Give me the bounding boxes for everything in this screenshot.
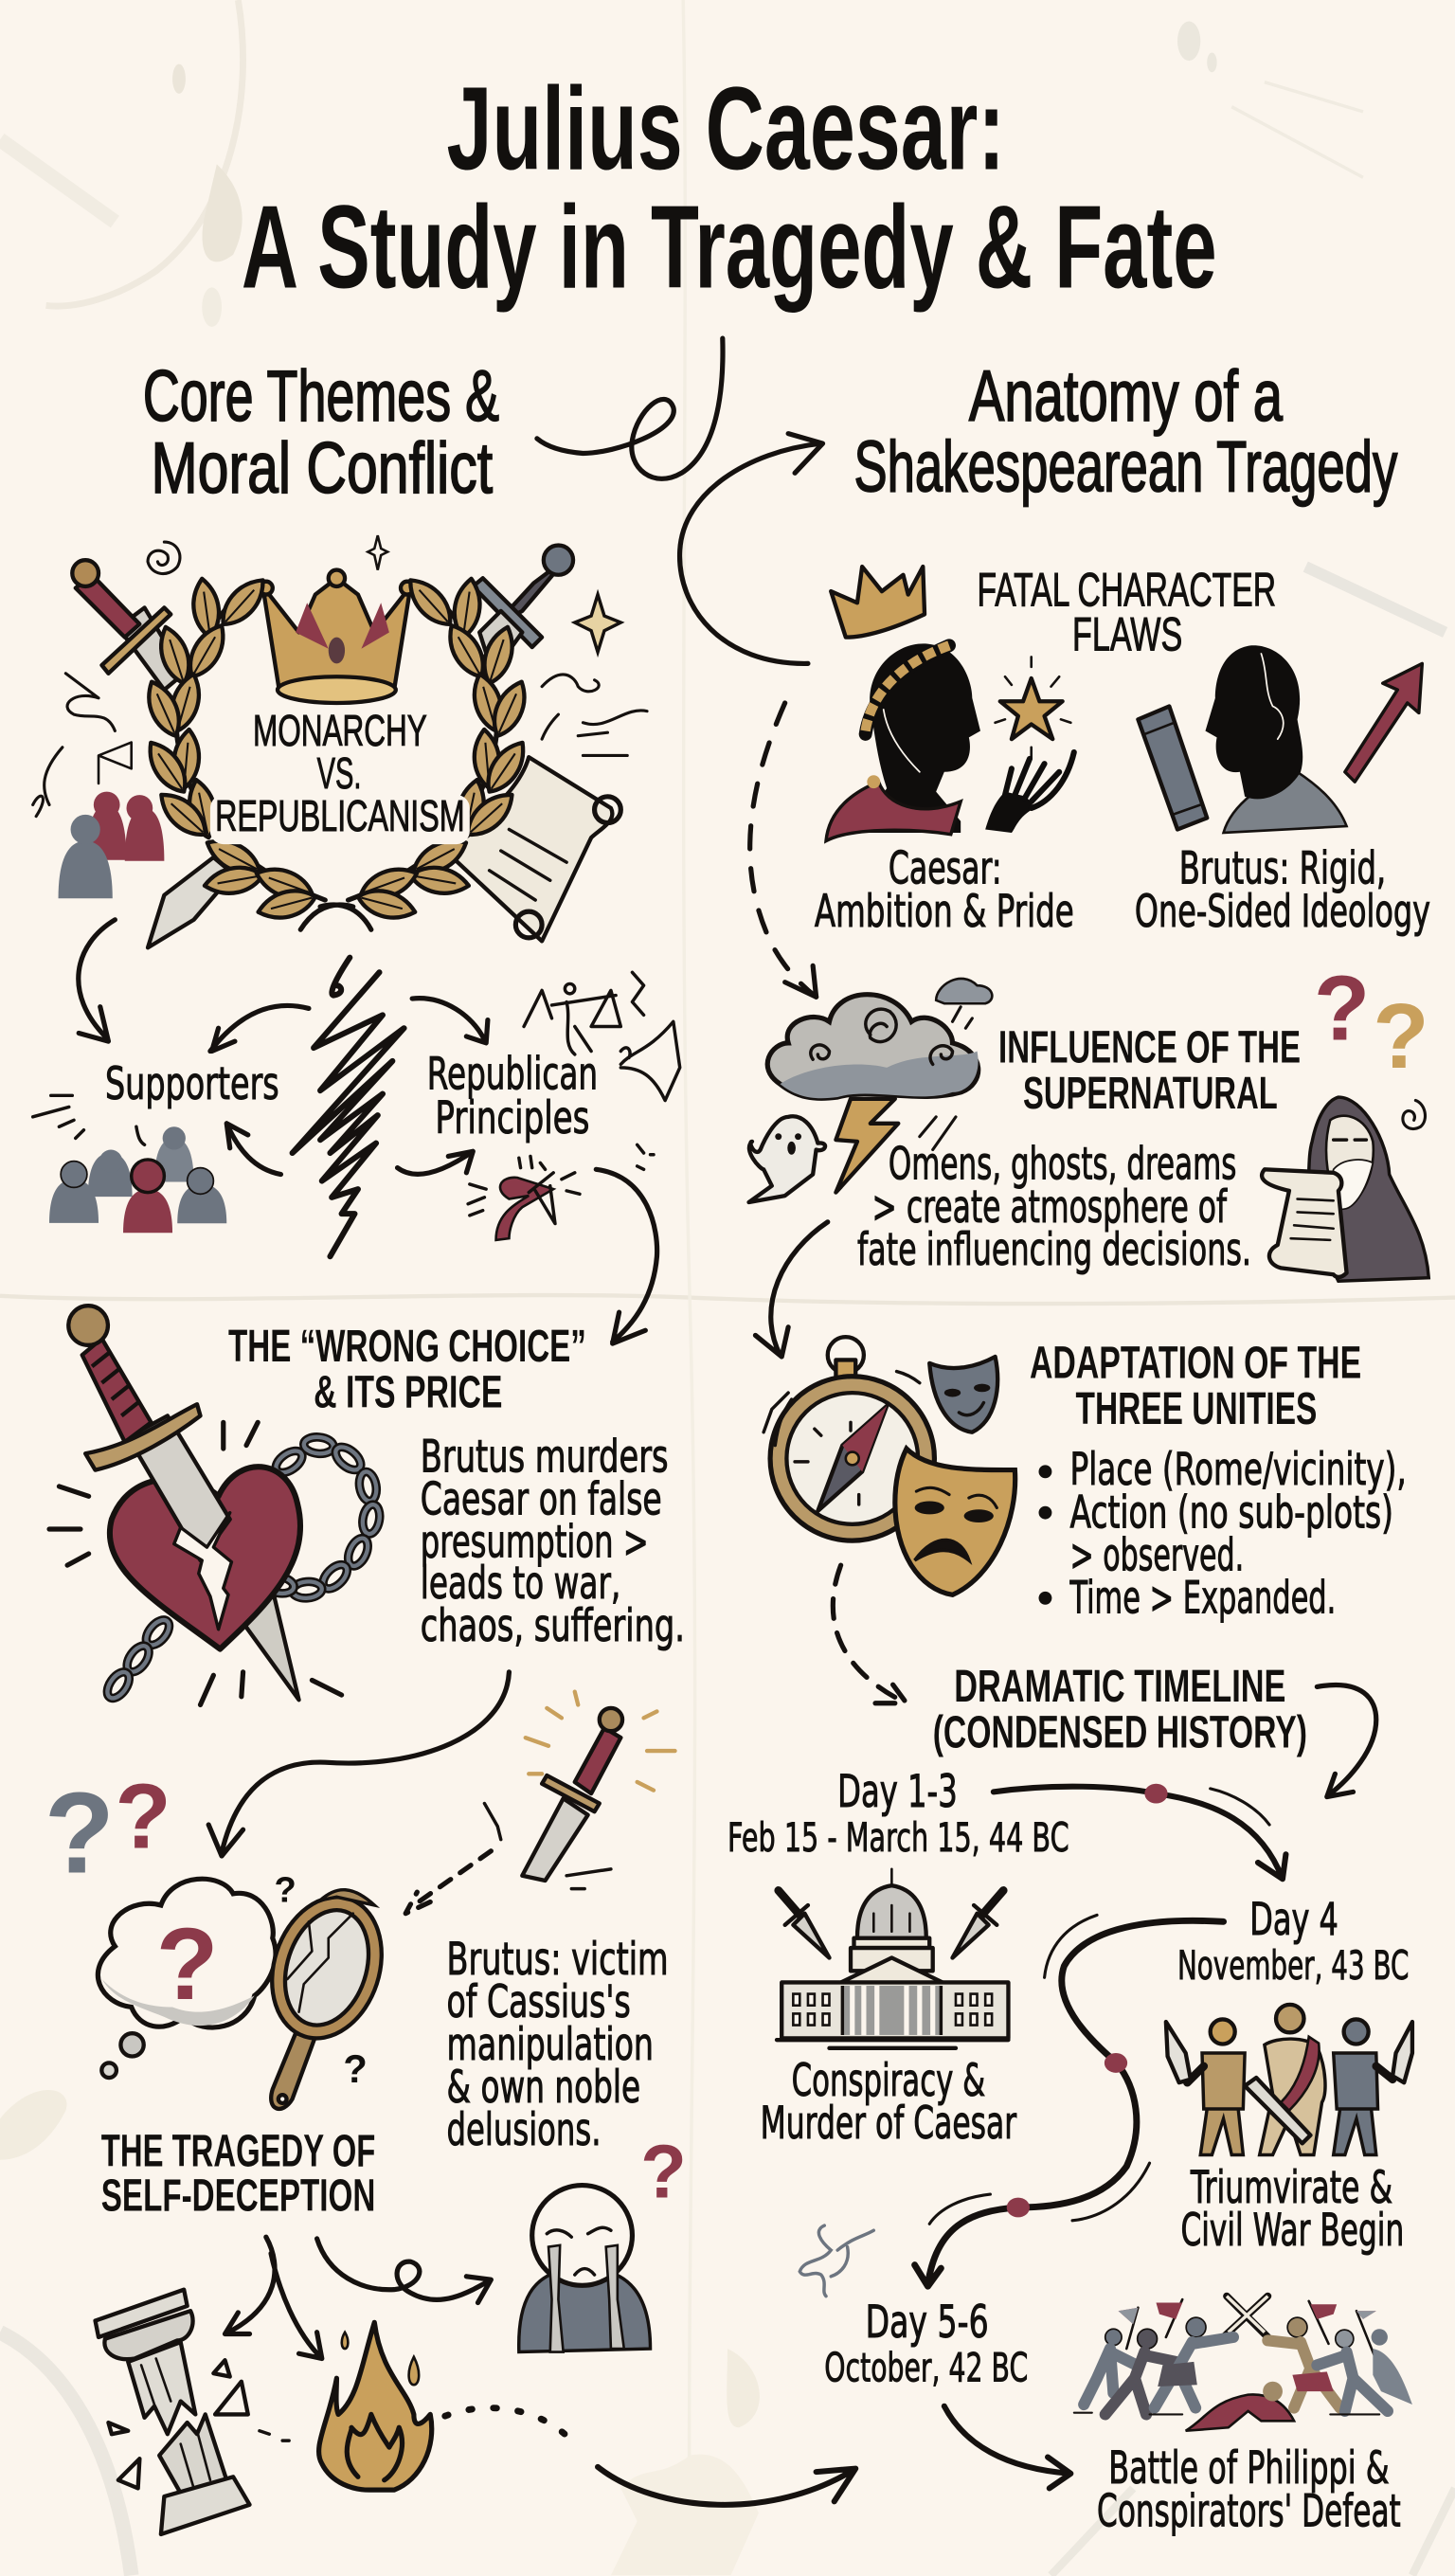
icon: crown [260, 570, 414, 703]
arrow: dashed to supernatural [750, 703, 817, 997]
heading: supernatural: INFLUENCE OF THE [998, 1022, 1301, 1073]
label: day 5-6: Day 5-6 [866, 2297, 989, 2349]
label: monarchy vs republicanism [210, 706, 470, 844]
burst ticks [49, 1422, 342, 1704]
label: day 4: Day 4 [1249, 1895, 1338, 1946]
heading: three unities: THREE UNITIES [1076, 1383, 1317, 1434]
illustration: monarchy vs republicanism emblem [33, 535, 647, 947]
label: supporters: Supporters [105, 1059, 279, 1110]
arrow: dashed to timeline [833, 1565, 907, 1703]
label: monarchy vs republicanism: VS. [317, 748, 361, 798]
arrow: bottom cross-over [598, 2467, 855, 2505]
icon: rising arrow [1345, 663, 1422, 782]
icon: flame [319, 2322, 432, 2490]
icon: grey scribble [799, 2225, 873, 2297]
icon: small crown [831, 567, 925, 638]
icon: question marks left [45, 1764, 171, 1897]
icon: crying figure [519, 2130, 687, 2352]
arrow: heading to timeline [1317, 1685, 1376, 1797]
left soldiers [1084, 2317, 1233, 2414]
icon: laurel wreath [140, 572, 533, 929]
title [242, 63, 1217, 313]
icon: ghost [749, 1116, 825, 1202]
pommel [68, 1306, 108, 1345]
text: omens: Omens, ghosts, dreams [889, 1140, 1236, 1191]
icon: lightning bolt [835, 1099, 898, 1193]
icon: star and hand [985, 657, 1074, 833]
text: brutus victim [447, 1935, 669, 2156]
icon: question marks left: ? [115, 1764, 171, 1867]
arrow: to unities [755, 1222, 828, 1357]
icon: brutus silhouette [1205, 645, 1347, 833]
icon: cracked mirror: ? [275, 1870, 296, 1911]
icon: tragedy mask [895, 1449, 1015, 1594]
label: republican principles: Republican [427, 1049, 598, 1100]
icon: triumvirate figures [1166, 2005, 1412, 2155]
left column heading [143, 356, 499, 509]
text: brutus murders: presumption > [421, 1517, 649, 1568]
icon: conflict scribble [293, 958, 404, 1256]
icon: question marks right: ? [1314, 956, 1370, 1059]
text: brutus victim: delusions. [447, 2105, 602, 2156]
icon: caesar silhouette [826, 643, 980, 841]
text: brutus murders: Caesar on false [421, 1474, 662, 1525]
label: republican principles [427, 1049, 598, 1144]
title: Julius Caesar: [447, 63, 1005, 195]
left column heading: Core Themes & [143, 356, 499, 437]
arrow: title swirl [537, 338, 723, 478]
heading: dramatic timeline: DRAMATIC TIMELINE [954, 1661, 1285, 1712]
text: brutus murders: Brutus murders [421, 1432, 669, 1483]
heading: tragedy of self-deception: THE TRAGEDY OF [101, 2126, 375, 2177]
label: republican principles: Principles [435, 1093, 589, 1144]
arrow: to self-deception [208, 1672, 509, 1856]
timeline dots [1007, 1784, 1168, 2217]
right branch [349, 572, 533, 924]
list: unities: > observed. [1069, 1530, 1244, 1581]
icon: cracked mirror: ? [343, 2046, 368, 2091]
text: caesar flaw: Caesar: [889, 844, 1002, 895]
text: caesar flaw [815, 844, 1074, 938]
text: brutus victim: manipulation [447, 2020, 654, 2071]
heading: fatal character flaws: FATAL CHARACTER [978, 563, 1276, 617]
icon: question marks left: ? [45, 1768, 115, 1897]
icon: compass [763, 1337, 934, 1540]
heading: wrong choice: & ITS PRICE [314, 1367, 502, 1418]
right soldiers [1267, 2317, 1412, 2411]
arrow: day 4 to day 5-6 [915, 1920, 1224, 2286]
icon: capitol building with daggers [777, 1869, 1008, 2048]
label: monarchy vs republicanism: MONARCHY [253, 706, 427, 755]
heading: wrong choice: THE “WRONG CHOICE” [228, 1321, 586, 1372]
text: brutus murders: chaos, suffering. [421, 1601, 685, 1652]
arrow: to supporters [79, 920, 115, 1041]
arrow: dotted from flame [445, 2408, 566, 2436]
arrow: to principles upper [412, 999, 488, 1043]
center figure [1245, 2005, 1325, 2155]
arrow: to philippi [944, 2406, 1070, 2488]
text: omens: > create atmosphere of [872, 1182, 1228, 1234]
icon: right sword [473, 546, 573, 674]
arrow head: dashed [785, 965, 817, 997]
right column heading: Anatomy of a [969, 356, 1283, 437]
icon: question marks right [1314, 956, 1429, 1088]
icon: sparkles and swirls [65, 535, 647, 755]
heading: tragedy of self-deception [101, 2126, 375, 2221]
icon: cracked mirror [255, 1870, 399, 2109]
arrow: to wrong choice [596, 1169, 657, 1343]
heart [110, 1467, 300, 1649]
label: day 5-6 [824, 2297, 1028, 2391]
text: brutus victim: of Cassius's [447, 1977, 631, 2028]
icon: supporters group [33, 1095, 226, 1233]
text: omens [857, 1140, 1251, 1276]
text: conspiracy [761, 2056, 1017, 2150]
label: day 5-6: October, 42 BC [824, 2345, 1028, 2391]
left branch [140, 572, 325, 924]
timeline [915, 1784, 1285, 2286]
icon: torn ribbon [468, 1156, 580, 1240]
text: triumvirate [1180, 2163, 1404, 2257]
heading: fatal character flaws [978, 563, 1276, 661]
arrow: to principles lower [398, 1151, 473, 1174]
heading: supernatural: SUPERNATURAL [1023, 1068, 1278, 1119]
icon: thought cloud: ? [156, 1907, 218, 2021]
heading: fatal character flaws: FLAWS [1072, 607, 1182, 661]
text: brutus murders: leads to war, [421, 1558, 620, 1610]
icon: crying figure: ? [640, 2130, 687, 2214]
left column heading: Moral Conflict [152, 428, 493, 509]
grip [82, 1339, 152, 1442]
heading: tragedy of self-deception: SELF-DECEPTION [101, 2170, 375, 2221]
upper blade [128, 1415, 230, 1560]
text: omens: fate influencing decisions. [857, 1225, 1251, 1276]
label: day 1-3: Day 1-3 [837, 1767, 958, 1818]
crack [174, 1513, 231, 1630]
guard [85, 1404, 201, 1470]
icon: small dagger [484, 1692, 675, 1889]
motion lines [929, 1789, 1269, 2224]
arrow: curly to crying figure [317, 2239, 491, 2303]
icon: crowd [33, 743, 164, 898]
right figure [1334, 2019, 1412, 2155]
icon: lower sword tip [148, 857, 233, 947]
label: monarchy vs republicanism: REPUBLICANISM [215, 791, 465, 840]
icon: broken column [96, 2290, 289, 2534]
flags [1119, 2299, 1376, 2360]
arrow: day 1-3 to day 4 [994, 1787, 1285, 1879]
arrow: fork to column and fire [225, 2237, 322, 2358]
icon: dagger through broken heart with chains [49, 1306, 382, 1704]
text: conspiracy: Murder of Caesar [761, 2099, 1017, 2150]
icon: scroll [440, 757, 620, 941]
text: philippi [1097, 2443, 1401, 2537]
text: brutus murders [421, 1432, 685, 1652]
list: unities [1039, 1445, 1407, 1624]
icon: hooded seer with scroll [1262, 1097, 1428, 1281]
text: brutus victim: & own noble [447, 2063, 640, 2114]
label: day 1-3 [728, 1767, 1069, 1861]
crossed swords [1224, 2297, 1267, 2337]
text: brutus victim: Brutus: victim [447, 1935, 669, 1986]
heading: wrong choice [228, 1321, 586, 1418]
fallen soldier [1186, 2382, 1294, 2431]
arrow: to anatomy [680, 434, 823, 663]
icon: book [1138, 706, 1207, 829]
arrow: dotted [405, 1851, 491, 1914]
text: brutus flaw [1135, 844, 1430, 938]
chains [103, 1436, 382, 1702]
heading: dramatic timeline [933, 1661, 1307, 1758]
heading: supernatural [998, 1022, 1301, 1119]
heading: three unities [1030, 1338, 1361, 1434]
lower blade [243, 1590, 299, 1700]
icon: left sword [72, 560, 184, 690]
text: conspiracy: Conspiracy & [792, 2056, 985, 2107]
right column heading [853, 356, 1397, 507]
icon: battle scene [1074, 2297, 1412, 2431]
arrow: to supporters upper [210, 1005, 309, 1052]
text: caesar flaw: Ambition & Pride [815, 887, 1074, 938]
icon: question marks right: ? [1373, 984, 1429, 1088]
arrow: to supporters lower [226, 1124, 280, 1175]
left figure [1166, 2019, 1245, 2155]
icon: storm cloud [767, 979, 992, 1150]
icon: thought cloud [98, 1879, 276, 2078]
label: day 4 [1177, 1895, 1409, 1989]
label: day 1-3: Feb 15 - March 15, 44 BC [728, 1814, 1069, 1861]
icon: comedy mask [929, 1357, 997, 1432]
icon: republican scribbles [524, 972, 680, 1169]
